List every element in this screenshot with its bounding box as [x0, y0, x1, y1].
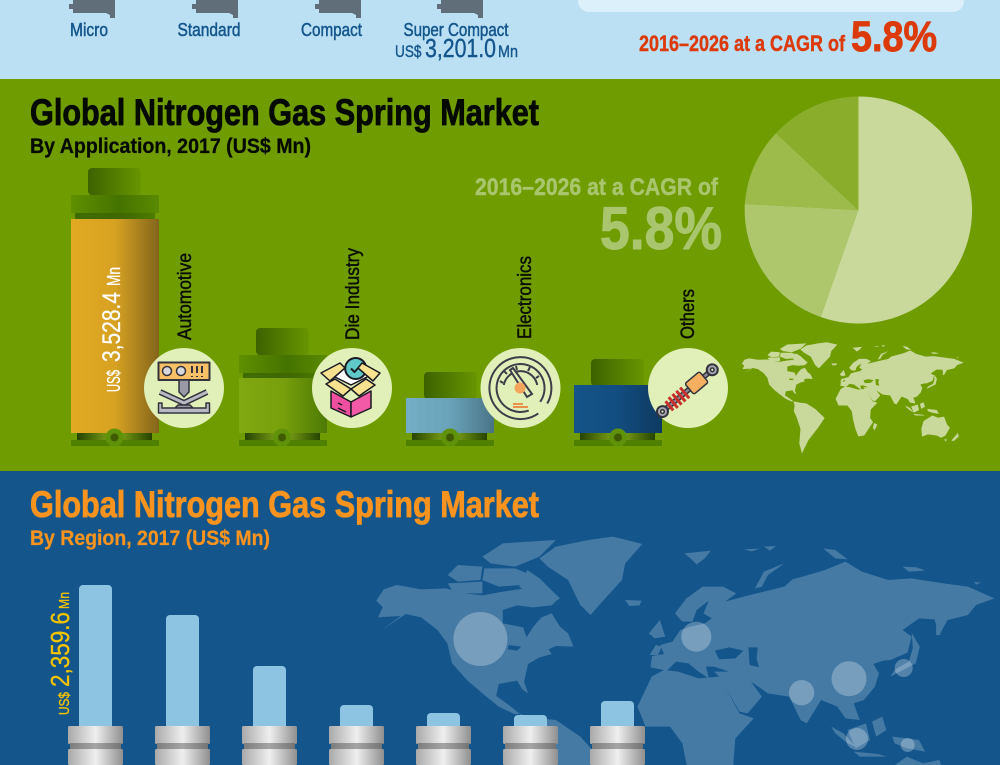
cylinder: others — [574, 359, 662, 446]
value: US$ 3,528.4 Mn: US$ — [104, 370, 124, 392]
labels: applications — [175, 248, 699, 340]
world map: application panel — [742, 342, 964, 453]
labels: applications: Die Industry — [343, 248, 364, 340]
icon: compact gas spring — [315, 0, 361, 18]
labels: product types: Super Compact — [404, 19, 508, 40]
icon: micro gas spring — [69, 0, 115, 18]
pie chart: share by application — [745, 96, 972, 323]
CAGR statement: 5.8% — [851, 13, 937, 61]
heading: application: Global Nitrogen Gas Spring Market — [30, 92, 539, 133]
labels: product types: Standard — [178, 19, 240, 40]
icon: die industry box — [312, 348, 392, 428]
labels: product types: Micro — [70, 19, 108, 40]
icon: automotive press — [144, 348, 224, 428]
CAGR callout on green — [475, 174, 722, 262]
value: US$ 3,528.4 Mn: Mn — [104, 267, 124, 286]
bar: region 4 — [329, 705, 384, 765]
bar: region 3 — [242, 666, 297, 765]
value: US$ 3,528.4 Mn: 3,528.4 — [98, 292, 126, 362]
labels: applications: Others — [678, 289, 699, 339]
labels: applications: Electronics — [515, 256, 536, 339]
icon: electronics gauge — [480, 348, 560, 428]
value: US$ 3,201.0 Mn: US$ — [395, 42, 422, 61]
labels: product types: Compact — [301, 19, 362, 40]
value: US$ 3,201.0 Mn: Mn — [498, 42, 518, 61]
value: US$ 2,359.6 Mn: Mn — [56, 592, 73, 609]
cylinder: automotive — [71, 168, 159, 446]
subheading: region: By Region, 2017 (US$ Mn) — [30, 527, 270, 550]
value: US$ 3,528.4 Mn — [98, 267, 126, 392]
subheading: application: By Application, 2017 (US$ Mn) — [30, 135, 311, 158]
value: US$ 2,359.6 Mn: 2,359.6 — [45, 612, 75, 687]
CAGR statement — [639, 13, 937, 61]
bar: region 1 — [68, 585, 123, 765]
value: US$ 3,201.0 Mn: 3,201.0 — [425, 33, 496, 63]
value: US$ 2,359.6 Mn: US$ — [56, 691, 73, 715]
icon: standard gas spring — [192, 0, 238, 18]
bar: region 7 — [590, 701, 645, 765]
bar: region 2 — [155, 615, 210, 765]
world map: region panel — [376, 537, 994, 765]
panel: by region — [0, 471, 1000, 765]
panel: segment by product type — [0, 0, 1000, 79]
bar: region 5 — [416, 713, 471, 765]
bar: region 6 — [503, 715, 558, 765]
rounded callout box — [578, 0, 964, 12]
cylinder: electronics — [406, 372, 494, 446]
labels: product types — [70, 19, 508, 40]
heading: region: Global Nitrogen Gas Spring Market — [30, 484, 539, 525]
icon: shock absorber — [648, 348, 728, 428]
CAGR callout on green: 2016–2026 at a CAGR of — [475, 174, 719, 201]
icon: super compact gas spring — [437, 0, 483, 18]
CAGR callout on green: 5.8% — [600, 195, 722, 262]
labels: applications: Automotive — [175, 253, 196, 340]
bubbles: regional markets — [453, 612, 915, 752]
panel: by application — [0, 79, 1000, 471]
cylinder: die industry — [239, 328, 327, 446]
CAGR statement: 2016–2026 at a CAGR of — [639, 31, 846, 56]
